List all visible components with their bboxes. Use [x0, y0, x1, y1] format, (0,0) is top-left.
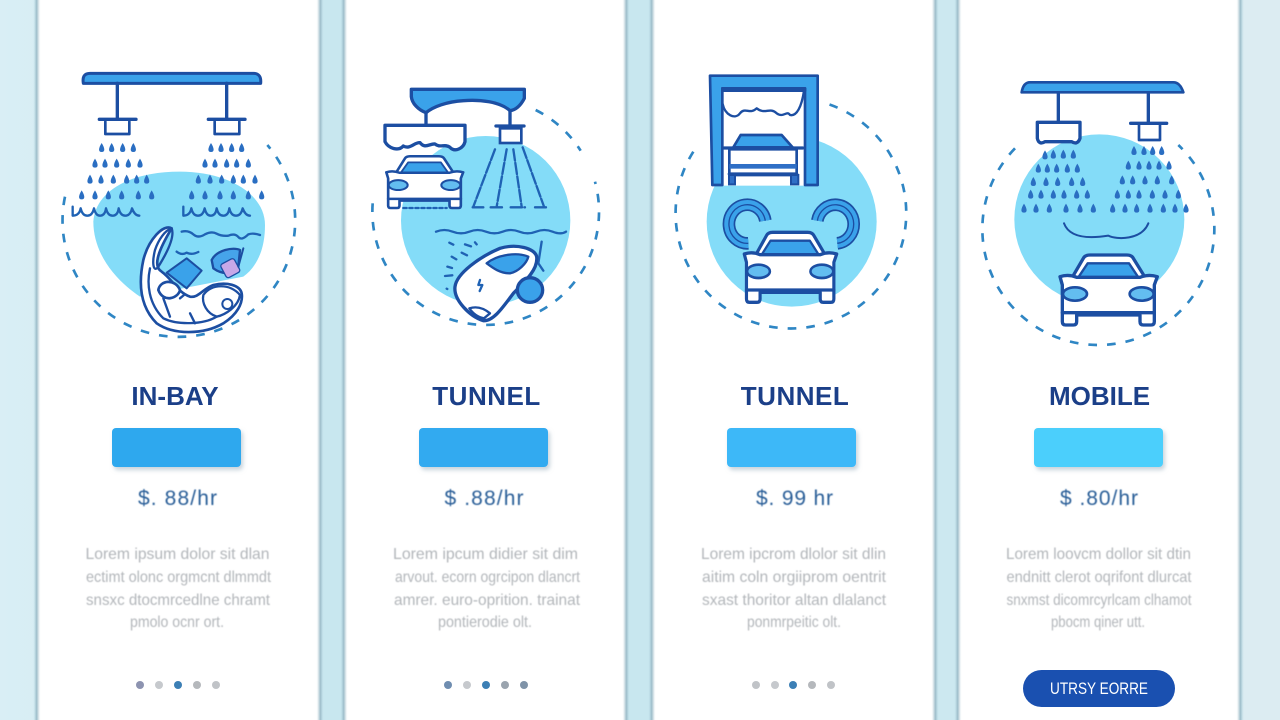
heading: MOBILE: [1049, 381, 1150, 411]
description text: ectimt olonc orgmcnt dlmmdt: [86, 569, 271, 586]
description text: arvout. ecorn ogrcipon dlancrt: [395, 569, 580, 586]
button bar: [419, 428, 548, 467]
price: $ .80/hr: [1060, 487, 1138, 510]
pagination dots: [444, 681, 528, 689]
panel: tunnel 1: [340, 0, 630, 720]
description text: [393, 546, 581, 631]
description text: amrer. euro-oprition. trainat: [394, 592, 581, 609]
call-to-action button: UTRSY EORRE: [1050, 679, 1148, 698]
button bar: [112, 428, 241, 467]
call-to-action button: [1023, 670, 1175, 707]
illustration: tunnel arch and car: [676, 76, 906, 328]
description text: [701, 546, 887, 631]
panel: mobile: [954, 0, 1244, 720]
price: $. 88/hr: [138, 487, 217, 510]
heading: TUNNEL: [741, 381, 849, 411]
button bar: [727, 428, 856, 467]
pagination dots: [136, 681, 220, 689]
description text: aitim coln orgiiprom oentrit: [702, 569, 887, 586]
description text: endnitt clerot oqrifont dlurcat: [1006, 569, 1192, 586]
illustration: mobile wash: [982, 82, 1214, 345]
price: $ .88/hr: [444, 487, 524, 510]
illustration: in-bay wash: [63, 73, 295, 337]
description text: [86, 546, 271, 631]
description text: [1006, 546, 1192, 631]
heading: IN-BAY: [131, 381, 219, 411]
illustration: tunnel wash with brush and spray: [372, 89, 599, 325]
description text: pbocm qiner utt.: [1051, 614, 1145, 631]
description text: Lorem loovcm dollor sit dtin: [1006, 546, 1191, 563]
description text: snxmst dicomrcyrlcam clhamot: [1006, 592, 1192, 609]
panel: tunnel 2: [648, 0, 939, 720]
description text: pontierodie olt.: [438, 614, 532, 631]
description text: snsxc dtocmrcedlne chramt: [86, 592, 271, 609]
button bar: [1034, 428, 1163, 467]
description text: Lorem ipsum dolor sit dlan: [86, 546, 270, 563]
description text: pmolo ocnr ort.: [130, 614, 224, 631]
heading: TUNNEL: [432, 381, 541, 411]
description text: Lorem ipcrom dlolor sit dlin: [701, 546, 886, 563]
price: $. 99 hr: [756, 487, 833, 510]
pagination dots: [752, 681, 835, 689]
description text: ponmrpeitic olt.: [747, 614, 841, 631]
description text: Lorem ipcum didier sit dim: [393, 546, 578, 563]
description text: sxast thoritor altan dlalanct: [702, 592, 887, 609]
panel: in-bay: [33, 0, 324, 720]
